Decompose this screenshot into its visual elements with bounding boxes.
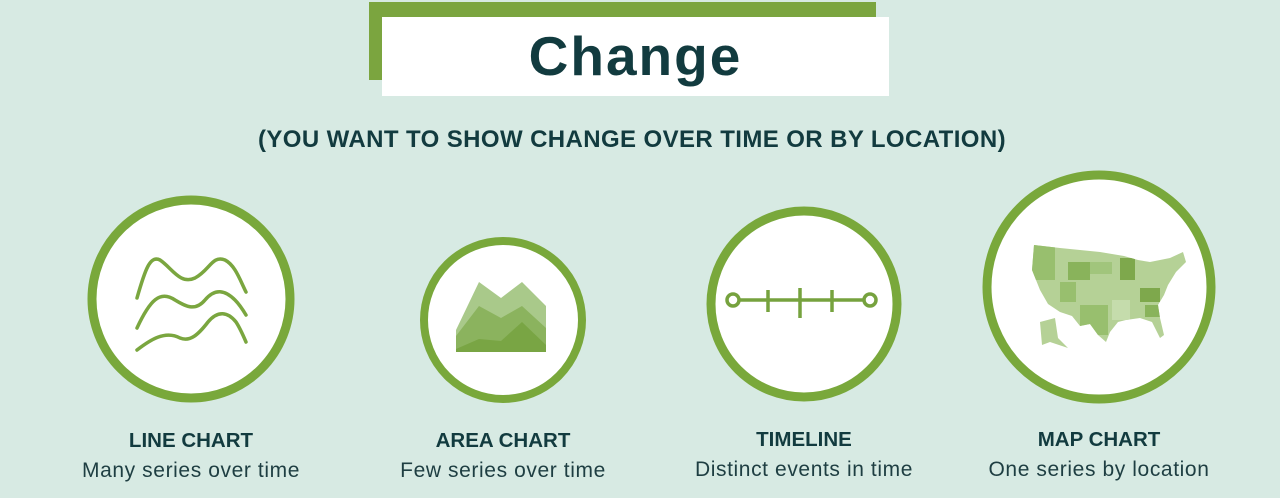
label: area chart: AREA CHART <box>436 429 570 452</box>
label: line chart: LINE CHART <box>129 429 253 452</box>
label: map chart <box>988 428 1209 481</box>
icon: line chart <box>92 200 290 398</box>
icon: timeline <box>711 211 897 397</box>
label: area chart <box>400 429 606 482</box>
icon: area chart <box>424 241 582 399</box>
label: timeline: TIMELINE <box>756 428 852 451</box>
title: Change <box>529 25 742 87</box>
icon: map chart <box>987 175 1211 399</box>
title banner <box>369 2 889 96</box>
label: area chart: Few series over time <box>400 459 606 482</box>
title <box>382 17 889 96</box>
label: line chart <box>82 429 300 482</box>
label: line chart: Many series over time <box>82 459 300 482</box>
label: timeline <box>695 428 913 481</box>
label: timeline: Distinct events in time <box>695 458 913 481</box>
icons <box>88 170 1216 404</box>
label: map chart: MAP CHART <box>1038 428 1160 451</box>
label: map chart: One series by location <box>988 458 1209 481</box>
subtitle: (YOU WANT TO SHOW CHANGE OVER TIME OR BY LOCATION) <box>258 126 1006 153</box>
